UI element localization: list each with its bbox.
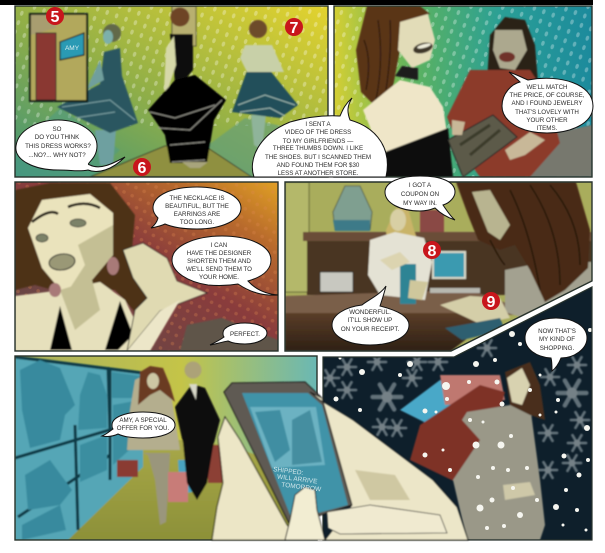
- bubble: shorten earrings: YOUR HOME.: [199, 274, 239, 281]
- bubble: coupon: I GOT A: [409, 182, 432, 189]
- bubble: price match: THE PRICE, OF COURSE,: [510, 92, 585, 99]
- panel: fitting room mirror: [15, 6, 328, 177]
- bubble: necklace and earrings: TOO LONG.: [180, 219, 214, 226]
- bubble: scanned the shoes: THREE THUMBS DOWN. I LIKE: [273, 145, 363, 152]
- bubble: scanned the shoes: LESS AT ANOTHER STORE.: [278, 170, 359, 177]
- bubble: coupon: MY WAY IN.: [403, 200, 437, 207]
- bubble: price match: AND I FOUND JEWELRY: [511, 100, 583, 107]
- bubble: scanned the shoes: TO MY GIRLFRIENDS —: [283, 138, 354, 145]
- bubble: price match: WE'LL MATCH: [526, 84, 568, 91]
- badge 9: 9: [487, 294, 496, 311]
- bubble: scanned the shoes: [252, 98, 387, 177]
- bubble: special offer: AMY, A SPECIAL: [119, 417, 167, 424]
- badge 8: 8: [428, 243, 437, 260]
- panel: snowfall shopper: [321, 285, 593, 541]
- bubble: dress question: THIS DRESS WORKS?: [25, 143, 91, 150]
- bubble: shorten earrings: SHORTEN THEM AND: [187, 258, 251, 265]
- bubble: dress question: DO YOU THINK: [35, 134, 80, 141]
- bubble: special offer: OFFER FOR YOU.: [117, 425, 170, 432]
- badge 7: [285, 18, 303, 37]
- panel: earrings close-up: [15, 182, 278, 351]
- bubble: scanned the shoes: I SENT A: [305, 121, 332, 128]
- bubble: receipt: IT'LL SHOW UP: [348, 317, 392, 324]
- badge 6: [133, 158, 151, 177]
- panel: shopping walkway with video wall: [15, 356, 317, 540]
- badge 5: 5: [51, 9, 60, 26]
- bubble: dress question: ...NO?... WHY NOT?: [28, 152, 86, 159]
- bubble: scanned the shoes: THE SHOES. BUT I SCANNED THEM: [265, 154, 371, 161]
- bubble: perfect: [210, 323, 267, 345]
- bubble: coupon: COUPON ON: [401, 191, 439, 198]
- bubble: receipt: ON YOUR RECEIPT.: [341, 326, 399, 333]
- bubble: necklace and earrings: BEAUTIFUL, BUT THE: [165, 203, 229, 210]
- inset: door with screen: [30, 14, 87, 101]
- bubble: price match: YOUR OTHER: [526, 117, 568, 124]
- bubble: scanned the shoes: VIDEO OF THE DRESS: [285, 129, 351, 136]
- bubble: my kind of shopping: MY KIND OF: [539, 336, 575, 343]
- bubble: price match: ITEMS.: [537, 125, 558, 132]
- phone in hand: [212, 382, 468, 540]
- badge 8: [423, 241, 441, 260]
- bubble: receipt: [332, 286, 409, 345]
- top black bar: [0, 0, 593, 5]
- bubble: necklace and earrings: THE NECKLACE IS: [169, 195, 225, 202]
- phone message: [273, 466, 322, 494]
- bubble: receipt: WONDERFUL.: [349, 309, 391, 316]
- snowflakes: [324, 338, 591, 480]
- bubble: necklace and earrings: EARRINGS ARE: [174, 211, 220, 218]
- bubble: dress question: SO: [53, 126, 62, 133]
- bubble: coupon: [385, 176, 455, 220]
- bubble: dress question: [16, 120, 125, 171]
- bubble: my kind of shopping: NOW THAT'S: [538, 328, 576, 335]
- badge 7: 7: [290, 20, 299, 37]
- phone message: TOMORROW: [281, 482, 322, 494]
- bubble: shorten earrings: I CAN: [211, 242, 227, 249]
- bubble: shorten earrings: HAVE THE DESIGNER: [187, 250, 252, 257]
- panel: sales associate with tablet: [334, 6, 592, 177]
- bubble: my kind of shopping: SHOPPING.: [540, 345, 574, 352]
- bubble: my kind of shopping: [525, 318, 587, 371]
- badge 5: [46, 7, 64, 26]
- badge 6: 6: [138, 160, 147, 177]
- bubble: price match: [502, 72, 593, 133]
- screen label AMY: AMY: [65, 45, 80, 52]
- bubble: special offer: [102, 412, 175, 438]
- bubble: perfect: PERFECT.: [230, 331, 260, 338]
- bubble: price match: THAT'S LOVELY WITH: [515, 109, 579, 116]
- badge 9: [482, 292, 500, 311]
- bubble: shorten earrings: [172, 236, 278, 295]
- phone message: WILL ARRIVE: [277, 474, 318, 486]
- bubble: shorten earrings: WE'LL SEND THEM TO: [186, 266, 252, 273]
- bubble: necklace and earrings: [151, 187, 241, 229]
- white dots: falling snow: [334, 328, 592, 532]
- panel: checkout counter: [285, 182, 592, 352]
- phone message: SHIPPED:: [273, 466, 304, 477]
- bubble: scanned the shoes: AND FOUND THEM FOR $30: [277, 162, 360, 169]
